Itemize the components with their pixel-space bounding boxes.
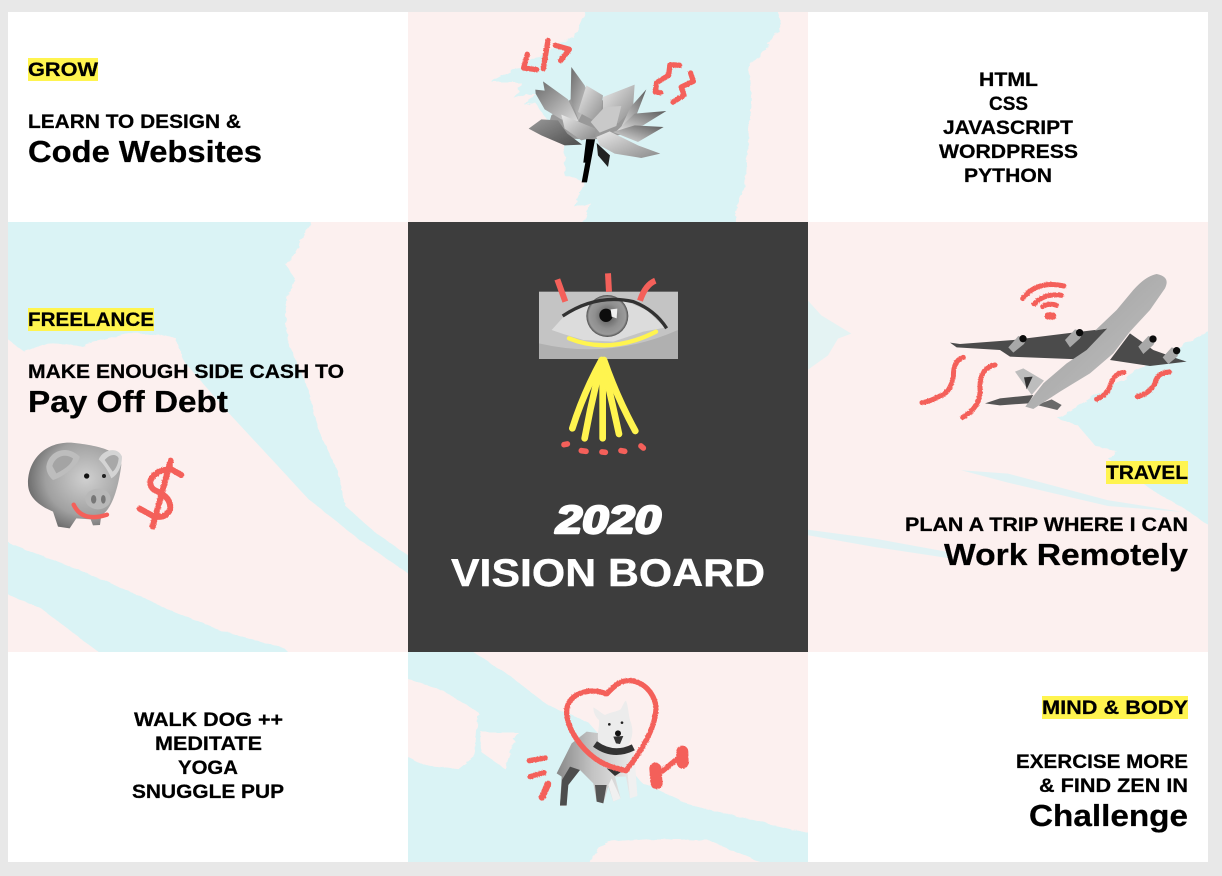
- text: snuggle pup: SNUGGLE PUP: [132, 781, 284, 803]
- icon: piggy bank: [28, 443, 122, 528]
- title: vision board: VISION BOARD: [451, 552, 765, 595]
- brush stroke: blue: [491, 2, 781, 232]
- tag: mind and body: MIND & BODY: [1042, 697, 1188, 719]
- heading: learn to design and code websites: [28, 111, 262, 169]
- text: walk dog: WALK DOG ++: [134, 709, 283, 731]
- heading: pay off debt: MAKE ENOUGH SIDE CASH TO: [28, 361, 344, 383]
- panel: travel: [805, 222, 1218, 652]
- heading: pay off debt: Pay Off Debt: [28, 384, 228, 419]
- heading: pay off debt: [28, 361, 344, 419]
- heading: work remotely: Work Remotely: [944, 537, 1189, 572]
- panel: centre title: [408, 222, 808, 652]
- panel: skills list: [808, 12, 1208, 222]
- brush stroke: blue: [408, 652, 808, 862]
- text: html: HTML: [979, 69, 1038, 91]
- text: wordpress: WORDPRESS: [939, 141, 1078, 163]
- icon: eye with rays: [539, 273, 678, 452]
- panel: lotus image: [408, 2, 808, 232]
- brush stroke: blue: [805, 297, 1218, 558]
- doodle: dollar sign: [140, 461, 181, 527]
- doodle: code brackets: [524, 40, 693, 102]
- icon: running dog: [557, 701, 637, 806]
- panel: grow: [8, 12, 408, 222]
- doodle: wifi and wind lines: [922, 285, 1169, 417]
- heading: challenge: & FIND ZEN IN: [1039, 775, 1188, 797]
- doodle: heart, dumbbell and motion lines: [529, 681, 683, 797]
- heading: challenge: [1016, 751, 1188, 833]
- heading: learn to design and code websites: Code Websites: [28, 134, 262, 169]
- heading: challenge: EXERCISE MORE: [1016, 751, 1188, 773]
- text: yoga: YOGA: [178, 757, 238, 779]
- tag: travel: TRAVEL: [1106, 462, 1188, 484]
- text: python: PYTHON: [964, 165, 1052, 187]
- panel: freelance: [0, 212, 418, 662]
- panel: dog activities list: [8, 652, 408, 862]
- panel: dog image: [408, 652, 808, 862]
- panel: mind and body: [808, 652, 1208, 862]
- icon: lotus flower: [529, 67, 666, 182]
- text: 2020: 2020: [555, 499, 661, 542]
- text: meditate: MEDITATE: [155, 733, 262, 755]
- text: css: CSS: [989, 93, 1028, 115]
- heading: work remotely: PLAN A TRIP WHERE I CAN: [905, 514, 1188, 536]
- heading: learn to design and code websites: LEARN TO DESIGN &: [28, 111, 241, 133]
- brush stroke: pink: [0, 212, 418, 662]
- text: javascript: JAVASCRIPT: [943, 117, 1073, 139]
- icon: airplane: [950, 274, 1187, 410]
- heading: work remotely: [905, 514, 1189, 572]
- tag: grow: GROW: [28, 59, 99, 81]
- tag: freelance: FREELANCE: [28, 309, 154, 331]
- heading: challenge: Challenge: [1029, 798, 1188, 833]
